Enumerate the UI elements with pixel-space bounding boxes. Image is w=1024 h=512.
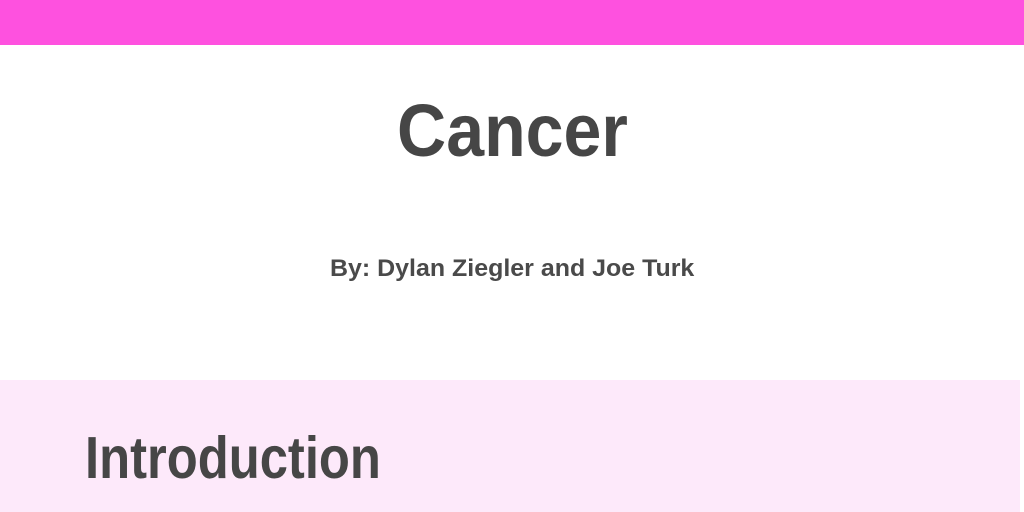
introduction section xyxy=(0,380,1020,512)
heading: Introduction: Introduction xyxy=(85,425,381,491)
byline: By: Dylan Ziegler and Joe Turk xyxy=(330,255,694,282)
top bar xyxy=(0,0,1024,45)
title: Cancer xyxy=(397,89,627,172)
